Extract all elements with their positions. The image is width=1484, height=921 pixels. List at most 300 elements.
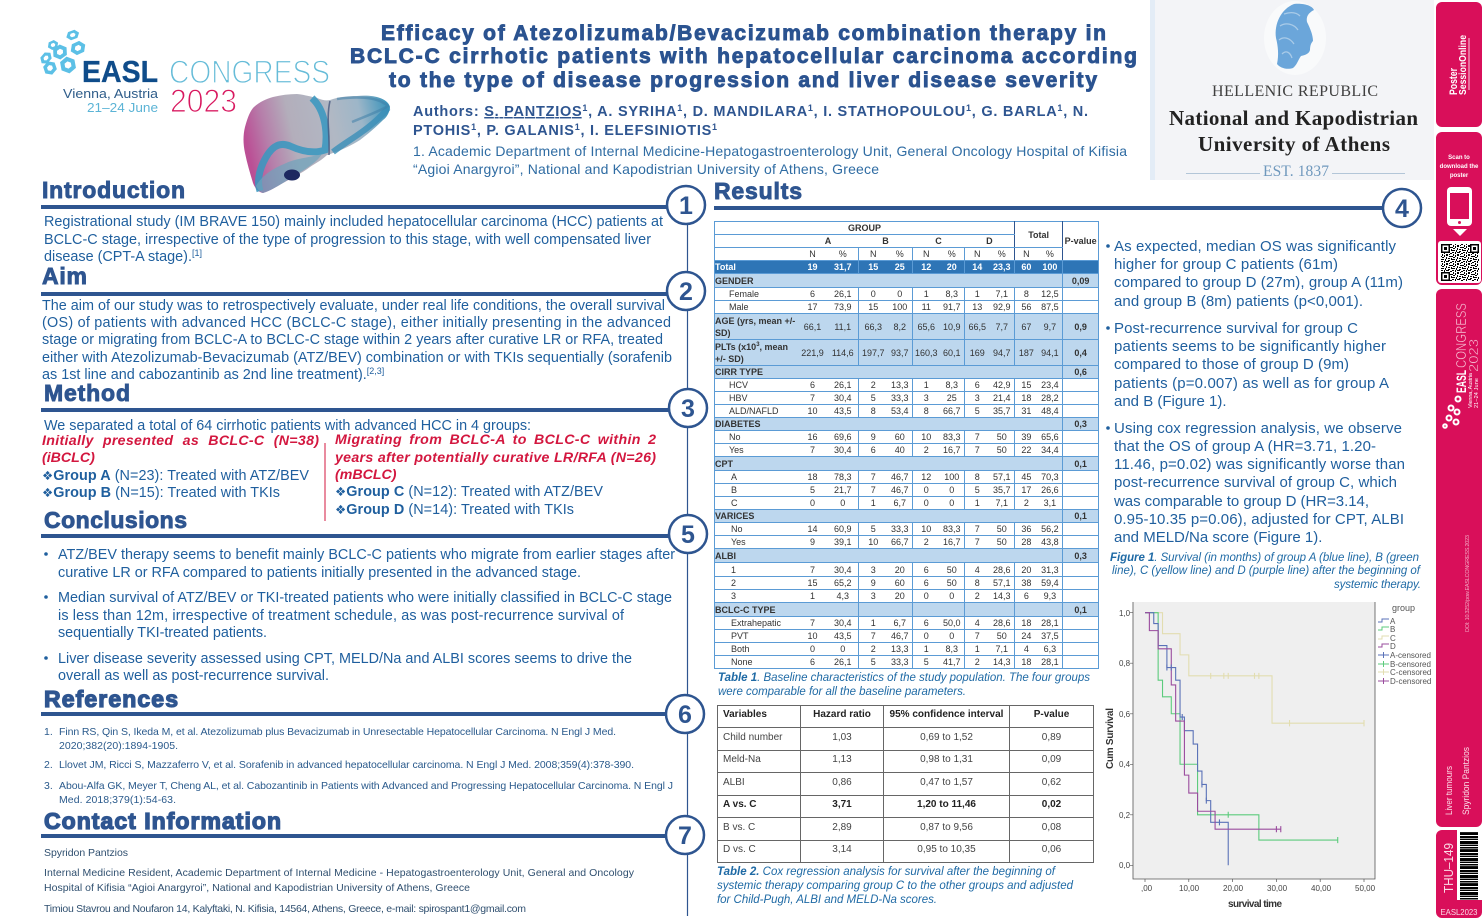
table 1: baseline characteristics: 3,1 xyxy=(1044,498,1056,508)
table 1: baseline characteristics: 26,1 xyxy=(834,289,852,299)
axis labels: 0,0 xyxy=(1119,861,1131,870)
table 1: baseline characteristics: 0 xyxy=(840,644,845,654)
table 1: baseline characteristics: 42,9 xyxy=(993,380,1011,390)
table 1: baseline characteristics: P-value xyxy=(1065,236,1097,246)
table 2: Cox regression: 2,89 xyxy=(832,822,852,832)
table 1: baseline characteristics: 11,1 xyxy=(834,322,851,332)
table 1: baseline characteristics: HBV xyxy=(729,393,748,403)
table 1: baseline characteristics: 7,1 xyxy=(996,289,1008,299)
table 1: baseline characteristics: 8,2 xyxy=(893,322,906,332)
table 1: baseline characteristics: 6 xyxy=(810,380,815,390)
table 1: baseline characteristics: 50 xyxy=(947,578,957,588)
table 1: baseline characteristics: 20 xyxy=(947,262,957,272)
table 1: baseline characteristics: 41,7 xyxy=(943,657,961,667)
icon: down arrow xyxy=(1453,229,1467,236)
caption: figure 1: line), C (yellow line) and D (purple line) after the beginning of xyxy=(1112,565,1422,577)
table 1: baseline characteristics: 6 xyxy=(975,380,980,390)
table 1: baseline characteristics: 57,1 xyxy=(993,578,1011,588)
table 1: baseline characteristics: 17 xyxy=(807,302,818,312)
sidebar: congress tab: Spyridon Pantzios xyxy=(1461,747,1472,815)
authors: PTOHIS xyxy=(413,123,470,139)
table 1: baseline characteristics: 7 xyxy=(810,618,815,628)
table 1: baseline characteristics: 93,7 xyxy=(891,348,909,358)
table 1: baseline characteristics: ALBI xyxy=(715,550,736,560)
text: results findings: and MELD/Na score (Figure 1). xyxy=(1114,529,1322,546)
panel: migrating groups: ❖Group D (N=14): Treated with TKIs xyxy=(335,502,574,518)
rule and badge 5: 5 xyxy=(681,521,695,549)
table 1: baseline characteristics: 53,4 xyxy=(891,406,909,416)
table 1: baseline characteristics: 100 xyxy=(892,302,907,312)
icon: Athena head xyxy=(1276,4,1314,69)
table 1: baseline characteristics: 7,1 xyxy=(996,498,1008,508)
table 1: baseline characteristics: None xyxy=(731,657,753,667)
text: contact: Internal Medicine Resident, Academic Department of Internal Medicine - Hepatogastroenterology Unit, General and Oncology xyxy=(44,867,635,879)
table 1: baseline characteristics: 65,6 xyxy=(917,322,935,332)
table 1: baseline characteristics: 50,0 xyxy=(943,618,961,628)
text: introduction: [1] xyxy=(192,248,202,258)
table 1: baseline characteristics: 15 xyxy=(807,578,818,588)
table 1: baseline characteristics: 66,5 xyxy=(968,322,986,332)
heading: Method: Method xyxy=(44,380,130,406)
table 1: baseline characteristics: 13 xyxy=(972,302,982,312)
text: results findings: patients (p=0.007) as well as for group A xyxy=(1114,375,1389,392)
table 1: baseline characteristics: AGE (yrs, mean +/- SD) xyxy=(715,316,795,338)
table 1: baseline characteristics: 24 xyxy=(1021,631,1031,641)
table 1: baseline characteristics: 11 xyxy=(922,302,931,312)
table 1: baseline characteristics: C xyxy=(935,236,942,246)
authors: 1 xyxy=(471,122,476,132)
affiliations: “Agioi Anargyroi”, National and Kapodistrian University of Athens, Greece xyxy=(413,161,879,177)
table 1: baseline characteristics: 4 xyxy=(1024,644,1029,654)
table 1: baseline characteristics: 13,3 xyxy=(891,644,909,654)
table 1: baseline characteristics: PVT xyxy=(731,631,749,641)
text: results findings: was comparable to group D (HR=3.14, xyxy=(1113,493,1369,510)
table 1: baseline characteristics: 3 xyxy=(731,591,736,601)
caption: table 1: Table 1. Baseline characteristics of the study population. The four groups xyxy=(718,672,1090,684)
table 1: baseline characteristics: 8 xyxy=(871,406,876,416)
table 1: baseline characteristics: 45 xyxy=(1021,472,1031,482)
table 1: baseline characteristics: % xyxy=(1046,249,1054,259)
table 1: baseline characteristics: 197,7 xyxy=(862,348,885,358)
table 1: baseline characteristics: Female xyxy=(729,289,759,299)
caption: figure 1: Figure 1. Survival (in months) of group A (blue line), B (green xyxy=(1110,552,1419,564)
panel: university logo: HELLENIC REPUBLIC xyxy=(1212,83,1378,100)
table 1: baseline characteristics: 6 xyxy=(924,564,929,574)
panel: university logo: National and Kapodistrian xyxy=(1169,106,1418,130)
table 1: baseline characteristics: 2 xyxy=(924,445,929,455)
table 1: baseline characteristics: 60,1 xyxy=(943,348,961,358)
table 2: Cox regression: Meld-Na xyxy=(723,754,761,765)
table 1: baseline characteristics: 33,3 xyxy=(891,524,909,534)
table 1: baseline characteristics: 114,6 xyxy=(832,348,854,358)
table 1: baseline characteristics: A xyxy=(731,472,737,482)
table 1: baseline characteristics: 3 xyxy=(871,591,876,601)
table 1: baseline characteristics: 7 xyxy=(871,472,876,482)
text: contact: Hospital of Kifisia “Agioi Anargyroi”, National and Kapodistrian University of Athens, Greece xyxy=(44,882,470,894)
QR code xyxy=(1438,241,1481,283)
table 1: baseline characteristics: 8 xyxy=(1024,289,1029,299)
table 2: Cox regression: Child number xyxy=(723,732,782,742)
table 1: baseline characteristics: 94,1 xyxy=(1041,348,1059,358)
axis labels: 50,00 xyxy=(1355,884,1376,893)
sidebar: poster session online tab: Poster xyxy=(1448,67,1460,95)
table 1: baseline characteristics: CIRR TYPE xyxy=(715,367,763,377)
table 1: baseline characteristics: 18 xyxy=(807,472,818,482)
table 1: baseline characteristics: 21,7 xyxy=(834,485,852,495)
table 1: baseline characteristics: 6,3 xyxy=(1044,644,1056,654)
table 1: baseline characteristics xyxy=(714,221,1099,669)
table 1: baseline characteristics: 48,4 xyxy=(1041,406,1059,416)
table 1: baseline characteristics: 50 xyxy=(947,564,957,574)
table 1: baseline characteristics: 66,7 xyxy=(943,406,961,416)
table 1: baseline characteristics: 26,6 xyxy=(1041,485,1059,495)
table 1: baseline characteristics: Yes xyxy=(729,445,744,455)
sidebar: abstract code and barcode: EASL2023 xyxy=(1440,907,1478,917)
text: references: Med. 2018;379(1):54-63. xyxy=(59,794,176,806)
table 1: baseline characteristics: 6 xyxy=(924,578,929,588)
table 1: baseline characteristics: 1 xyxy=(924,380,929,390)
table 1: baseline characteristics: 21,4 xyxy=(993,393,1011,403)
caption: table 1 xyxy=(718,672,1090,698)
text: contact xyxy=(44,847,635,915)
table 1: baseline characteristics: 1 xyxy=(731,564,736,574)
table 1: baseline characteristics: 12 xyxy=(921,472,931,482)
table 1: baseline characteristics: Total xyxy=(715,262,736,272)
title: BCLC-C cirrhotic patients with hepatocellular carcinoma according xyxy=(350,45,1138,68)
text: references: Abou-Alfa GK, Meyer T, Cheng AL, et al. Cabozantinib in Patients with Advanced and Progressing Hepatocellular Carcinoma. N Engl J xyxy=(59,780,673,792)
table 1: baseline characteristics: % xyxy=(998,249,1006,259)
table 1: baseline characteristics: 0 xyxy=(840,498,845,508)
table 1: baseline characteristics: 14 xyxy=(807,524,818,534)
table 1: baseline characteristics: 0 xyxy=(924,498,929,508)
table 1: baseline characteristics: 221,9 xyxy=(801,348,824,358)
authors: , I. STATHOPOULOU xyxy=(814,104,965,120)
table 1: baseline characteristics: 169 xyxy=(970,348,985,358)
panel: initially presented groups: ❖Group B (N=15): Treated with TKIs xyxy=(42,485,280,501)
authors: 1 xyxy=(808,103,813,113)
divider xyxy=(324,443,326,521)
table 1: baseline characteristics: 20 xyxy=(895,564,905,574)
table 1: baseline characteristics: 8,3 xyxy=(945,289,958,299)
table 2: Cox regression: 0,09 xyxy=(1042,754,1061,765)
survival curves xyxy=(1145,613,1364,865)
text: references xyxy=(44,726,673,806)
table 1: baseline characteristics: 33,3 xyxy=(891,657,909,667)
table 1: baseline characteristics: 50 xyxy=(997,537,1007,547)
table 1: baseline characteristics: 46,7 xyxy=(891,485,909,495)
table 1: baseline characteristics: 14,3 xyxy=(993,657,1011,667)
title: Efficacy of Atezolizumab/Bevacizumab combination therapy in xyxy=(381,22,1107,45)
table 1: baseline characteristics: 0,1 xyxy=(1074,458,1087,468)
text: results findings: As expected, median OS was significantly xyxy=(1114,238,1396,255)
text: references: Finn RS, Qin S, Ikeda M, et al. Atezolizumab plus Bevacizumab in Unresectable Hepatocellular Carcinoma. N Engl J Med. xyxy=(59,726,616,738)
legend: A-censored xyxy=(1390,651,1431,660)
text: introduction: BCLC-C stage, irrespective of the type of progression to this stage, with well compensated liver xyxy=(44,232,651,248)
text: references: 2020;382(20):1894-1905. xyxy=(59,740,178,752)
icon: EASL hexagon cluster xyxy=(38,29,88,77)
table 1: baseline characteristics: 9,3 xyxy=(1044,591,1056,601)
table 2: Cox regression: 3,14 xyxy=(832,844,852,855)
table 1: baseline characteristics: 0 xyxy=(924,485,929,495)
table 1: baseline characteristics: 7 xyxy=(975,432,980,442)
table 1: baseline characteristics: 0,1 xyxy=(1074,604,1087,614)
table 1: baseline characteristics: N xyxy=(809,249,816,259)
table 1: baseline characteristics: 1 xyxy=(975,498,980,508)
authors: , G. BARLA xyxy=(972,104,1057,120)
table 1: baseline characteristics: 6 xyxy=(924,618,929,628)
authors: Authors: S. PANTZIOS xyxy=(413,104,582,120)
table 2: Cox regression: A vs. C xyxy=(723,799,757,810)
table 1: baseline characteristics: 39,1 xyxy=(834,537,852,547)
table 1: baseline characteristics: 100 xyxy=(944,472,959,482)
table 1: baseline characteristics: N xyxy=(870,249,876,259)
table 1: baseline characteristics: 7 xyxy=(871,631,876,641)
table 1: baseline characteristics: 14,3 xyxy=(993,591,1011,601)
table 1: baseline characteristics: 26,1 xyxy=(834,657,852,667)
table 1: baseline characteristics: 9 xyxy=(810,537,815,547)
table 1: baseline characteristics: N xyxy=(923,249,930,259)
table 1: baseline characteristics: 36 xyxy=(1021,524,1031,534)
table 1: baseline characteristics: 18 xyxy=(1021,393,1031,403)
authors: 1 xyxy=(575,122,580,132)
text: references: 3. xyxy=(44,780,53,792)
table 1: baseline characteristics: 1 xyxy=(810,591,815,601)
table 1: baseline characteristics: 2 xyxy=(1024,498,1029,508)
table 1: baseline characteristics: % xyxy=(948,249,956,259)
table 1: baseline characteristics: 43,8 xyxy=(1041,537,1059,547)
sidebar: congress tab: CONGRESS xyxy=(1453,303,1470,368)
table 1: baseline characteristics: 65,6 xyxy=(1041,432,1059,442)
table 1: baseline characteristics: 8,3 xyxy=(945,380,958,390)
table 1: baseline characteristics: 0 xyxy=(924,591,929,601)
logo: EASL Congress 2023: EASL xyxy=(82,54,158,89)
table 1: baseline characteristics: 25 xyxy=(895,262,905,272)
caption: figure 1: systemic therapy. xyxy=(1334,579,1421,591)
table 1: baseline characteristics: 3 xyxy=(924,393,929,403)
caption: table 2: for Child-Pugh, ALBI and MELD-Na scores. xyxy=(717,894,937,906)
table 2: Cox regression: 1,20 to 11,46 xyxy=(917,799,976,810)
table 1: baseline characteristics: 40 xyxy=(895,445,905,455)
sidebar: scan to download tab: poster xyxy=(1450,173,1469,179)
text: references: 1. xyxy=(44,726,53,738)
table 1: baseline characteristics: 28,6 xyxy=(993,618,1011,628)
table 1: baseline characteristics: 160,3 xyxy=(915,348,938,358)
table 1: baseline characteristics: 5 xyxy=(871,657,876,667)
authors: 1 xyxy=(966,103,971,113)
table 1: baseline characteristics: 0 xyxy=(871,289,876,299)
text: results findings: Using cox regression analysis, we observe xyxy=(1114,420,1402,437)
table 1: baseline characteristics: 57,1 xyxy=(993,472,1011,482)
table 1: baseline characteristics: 15 xyxy=(868,262,878,272)
text: conclusions: overall as well as post-recurrence survival. xyxy=(58,668,329,684)
table 1: baseline characteristics: 7 xyxy=(975,631,980,641)
axis labels: ,00 xyxy=(1141,884,1153,893)
table 1: baseline characteristics: 20 xyxy=(1021,564,1031,574)
table 1: baseline characteristics: 187 xyxy=(1019,348,1034,358)
rule and badge 6 xyxy=(41,695,704,733)
axis labels: 0,8 xyxy=(1119,659,1131,668)
table 1: baseline characteristics: 1 xyxy=(975,644,980,654)
caption: table 2: systemic therapy comparing group C to the other groups and adjusted xyxy=(717,880,1074,892)
panel: university logo: University of Athens xyxy=(1198,132,1390,156)
table 1: baseline characteristics: 14 xyxy=(972,262,982,272)
table 1: baseline characteristics: CPT xyxy=(715,458,733,468)
text: conclusions xyxy=(44,547,675,684)
rule and badge 2 xyxy=(41,272,705,310)
logo: EASL Congress 2023: 21–24 June xyxy=(87,100,158,115)
table 1: baseline characteristics: 5 xyxy=(810,485,815,495)
table 1: baseline characteristics: 31 xyxy=(1021,406,1031,416)
text: conclusions: curative LR or RFA compared to patients initially presented in the advanced stage. xyxy=(58,565,581,581)
table 2: Cox regression: 0,98 to 1,31 xyxy=(920,754,973,765)
table 1: baseline characteristics: 39 xyxy=(1021,432,1031,442)
table 1: baseline characteristics: 46,7 xyxy=(891,631,909,641)
table 1: baseline characteristics: 6,7 xyxy=(893,618,906,628)
table 1: baseline characteristics: 8 xyxy=(975,578,980,588)
logo: EASL Congress 2023: CONGRESS xyxy=(169,54,330,90)
authors: , A. SYRIHA xyxy=(588,104,677,120)
table 1: baseline characteristics: 10 xyxy=(807,631,818,641)
table 1: baseline characteristics: 30,4 xyxy=(834,393,852,403)
table 1: baseline characteristics: 5 xyxy=(871,393,876,403)
table 1: baseline characteristics: 23,4 xyxy=(1041,380,1059,390)
rule and badge 3 xyxy=(41,389,707,427)
table 1: baseline characteristics: 2 xyxy=(871,380,876,390)
table 2: Cox regression: 0,08 xyxy=(1042,822,1061,832)
table 1: baseline characteristics: 6 xyxy=(810,657,815,667)
table 2: Cox regression: 3,71 xyxy=(832,799,852,810)
panel: initially presented groups: Initially presented as BCLC-C (N=38) xyxy=(42,433,319,449)
table 1: baseline characteristics: 2 xyxy=(731,578,736,588)
table 1: baseline characteristics: 7 xyxy=(975,524,980,534)
table 1: baseline characteristics: 25 xyxy=(947,393,957,403)
text: results findings: patients seems to be significantly higher xyxy=(1114,338,1386,355)
text: aim xyxy=(42,298,672,383)
table 1: baseline characteristics: 5 xyxy=(975,485,980,495)
table 1: baseline characteristics: 0 xyxy=(949,498,954,508)
heading: Introduction: Introduction xyxy=(42,177,185,203)
table 2: Cox regression: 0,69 to 1,52 xyxy=(920,732,973,742)
table 1: baseline characteristics: A xyxy=(825,236,831,246)
affiliations: 1. Academic Department of Internal Medicine-Hepatogastroenterology Unit, General Oncology Hospital of Kifisia xyxy=(413,143,1127,159)
table 1: baseline characteristics: 4 xyxy=(975,564,980,574)
text: results findings: compared to group D (27m), group A (11m) xyxy=(1114,274,1403,291)
table 1: baseline characteristics: 3 xyxy=(871,564,876,574)
table 1: baseline characteristics: 9 xyxy=(871,578,876,588)
table 1: baseline characteristics: 7 xyxy=(810,445,815,455)
authors: 1 xyxy=(712,122,717,132)
table 1: baseline characteristics: 3 xyxy=(975,393,980,403)
table 1: baseline characteristics: 31,7 xyxy=(834,262,852,272)
table 1: baseline characteristics: 10 xyxy=(807,406,818,416)
text: conclusions: Median survival of ATZ/BEV or TKI-treated patients who were initially classified in BCLC-C stage xyxy=(58,590,672,606)
caption: table 2 xyxy=(717,866,1074,906)
table 1: baseline characteristics: 7 xyxy=(871,485,876,495)
axis labels xyxy=(1119,609,1376,893)
table 1: baseline characteristics: 0,09 xyxy=(1072,276,1089,286)
table 1: baseline characteristics: 66,3 xyxy=(864,322,882,332)
table 1: baseline characteristics: HCV xyxy=(729,380,748,390)
table 2: Cox regression: D vs. C xyxy=(723,844,756,855)
table 1: baseline characteristics: N xyxy=(974,249,980,259)
table 1: baseline characteristics: No xyxy=(731,524,743,534)
table 2: Cox regression: 1,03 xyxy=(832,732,852,742)
table 1: baseline characteristics: 1 xyxy=(871,498,876,508)
table 1: baseline characteristics: N xyxy=(1023,249,1030,259)
sidebar: poster session online tab: SessionOnline xyxy=(1457,35,1469,95)
table 1: baseline characteristics: 0 xyxy=(924,631,929,641)
panel: initially presented groups: (iBCLC) xyxy=(42,450,95,466)
heading: References: References xyxy=(44,686,178,712)
axis labels: 30,00 xyxy=(1267,884,1288,893)
table 1: baseline characteristics: 56 xyxy=(1021,302,1031,312)
logo: EASL Congress 2023 xyxy=(38,29,330,119)
table 1: baseline characteristics: 9 xyxy=(871,432,876,442)
table 1: baseline characteristics: 7,1 xyxy=(996,644,1008,654)
table 2: Cox regression: ALBI xyxy=(723,776,745,788)
caption: figure 1 xyxy=(1110,552,1422,591)
text: introduction xyxy=(44,214,663,265)
axis labels: 20,00 xyxy=(1223,884,1244,893)
table 1: baseline characteristics: 4 xyxy=(975,618,980,628)
table 1: baseline characteristics: 7 xyxy=(810,393,815,403)
authors: 1 xyxy=(1057,103,1062,113)
table 2: Cox regression: 0,87 to 9,56 xyxy=(920,822,973,832)
table 1: baseline characteristics: 73,9 xyxy=(834,302,852,312)
table 1: baseline characteristics: 13,3 xyxy=(891,380,909,390)
table 1: baseline characteristics: 83,3 xyxy=(943,432,961,442)
table 2: Cox regression: 0,62 xyxy=(1042,776,1061,788)
table 1: baseline characteristics: 33,3 xyxy=(891,393,909,403)
table 1: baseline characteristics: 4,3 xyxy=(836,591,849,601)
text: results findings: and B (Figure 1). xyxy=(1114,393,1227,410)
table 1: baseline characteristics: 50 xyxy=(997,524,1007,534)
table 1: baseline characteristics: 0 xyxy=(810,644,815,654)
legend: C xyxy=(1390,634,1396,643)
text: results findings xyxy=(1106,238,1405,546)
table 1: baseline characteristics: 0,9 xyxy=(1074,322,1087,332)
table 1: baseline characteristics: 50 xyxy=(997,445,1007,455)
table 1: baseline characteristics: 19 xyxy=(807,262,818,272)
table 1: baseline characteristics: 10 xyxy=(868,537,878,547)
table 1: baseline characteristics: ALD/NAFLD xyxy=(729,406,779,416)
table 2: Cox regression: P-value xyxy=(1034,709,1069,720)
axis labels: 40,00 xyxy=(1311,884,1332,893)
table 1: baseline characteristics: 7 xyxy=(810,564,815,574)
sidebar: congress tab: Liver tumours xyxy=(1444,766,1455,815)
authors: , I. ELEFSINIOTIS xyxy=(580,123,712,139)
table 1: baseline characteristics: 0,3 xyxy=(1074,419,1087,429)
table 2: Cox regression: 95% confidence interval xyxy=(890,709,1003,720)
table 1: baseline characteristics: 10 xyxy=(921,432,931,442)
table 1: baseline characteristics: Yes xyxy=(731,537,746,547)
table 1: baseline characteristics: No xyxy=(729,432,741,442)
legend xyxy=(1378,603,1431,686)
table 1: baseline characteristics: 17 xyxy=(1021,485,1031,495)
table 1: baseline characteristics: 16 xyxy=(807,432,818,442)
table 1: baseline characteristics: 69,6 xyxy=(834,432,852,442)
table 1: baseline characteristics: 78,3 xyxy=(834,472,852,482)
table 1: baseline characteristics: 28,6 xyxy=(993,564,1011,574)
axis labels: 0,2 xyxy=(1119,811,1131,820)
rule and badge 3: 3 xyxy=(681,395,695,423)
table 1: baseline characteristics: 9,7 xyxy=(1044,322,1056,332)
chart: Kaplan-Meier survival curves: Cum Survival xyxy=(1105,708,1116,769)
table 1: baseline characteristics: 5 xyxy=(975,406,980,416)
text: results findings: compared to those of group D (9m) xyxy=(1114,356,1349,373)
table 1: baseline characteristics: 15 xyxy=(1021,380,1031,390)
table 1: baseline characteristics: Total xyxy=(1028,230,1049,240)
